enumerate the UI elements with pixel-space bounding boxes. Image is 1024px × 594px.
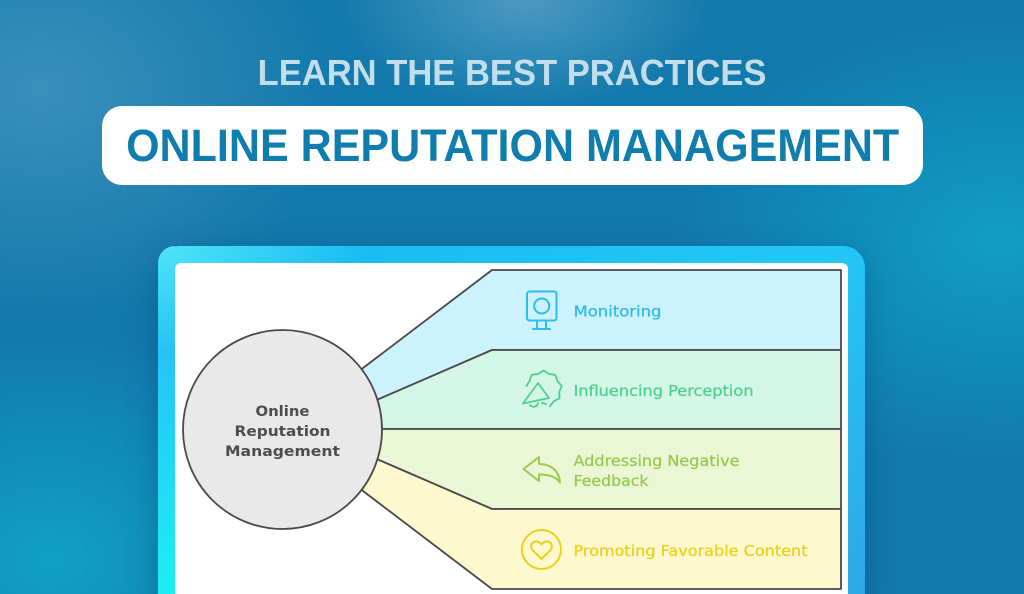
central circle — [183, 330, 382, 529]
segment: monitoring — [300, 270, 841, 430]
segment: addressing negative feedback — [300, 429, 841, 509]
label: addressing negative feedback: Feedback — [574, 472, 649, 490]
label: influencing perception: Influencing Perception — [574, 382, 754, 400]
panel: diagram card border — [158, 246, 865, 594]
card left edge — [158, 246, 175, 594]
segment: promoting favorable content — [300, 430, 841, 589]
icon: megaphone with burst — [523, 370, 562, 407]
label: addressing negative feedback: Addressing Negative — [574, 452, 740, 470]
label: monitoring: Monitoring — [574, 302, 662, 320]
segment: influencing perception — [300, 350, 841, 430]
icon: heart in circle — [522, 530, 561, 569]
panel: diagram white background — [175, 263, 848, 594]
title pill — [102, 106, 923, 185]
central label — [225, 404, 340, 460]
subtitle heading: LEARN THE BEST PRACTICES — [258, 52, 766, 93]
central label: Reputation — [234, 424, 330, 440]
label: addressing negative feedback — [574, 452, 740, 490]
icon: reply arrow — [524, 457, 560, 482]
central label: Management — [225, 444, 340, 460]
icon: monitor — [527, 292, 556, 329]
central label: Online — [256, 404, 310, 420]
label: promoting favorable content: Promoting Favorable Content — [574, 542, 808, 560]
title pill: ONLINE REPUTATION MANAGEMENT — [126, 120, 899, 171]
